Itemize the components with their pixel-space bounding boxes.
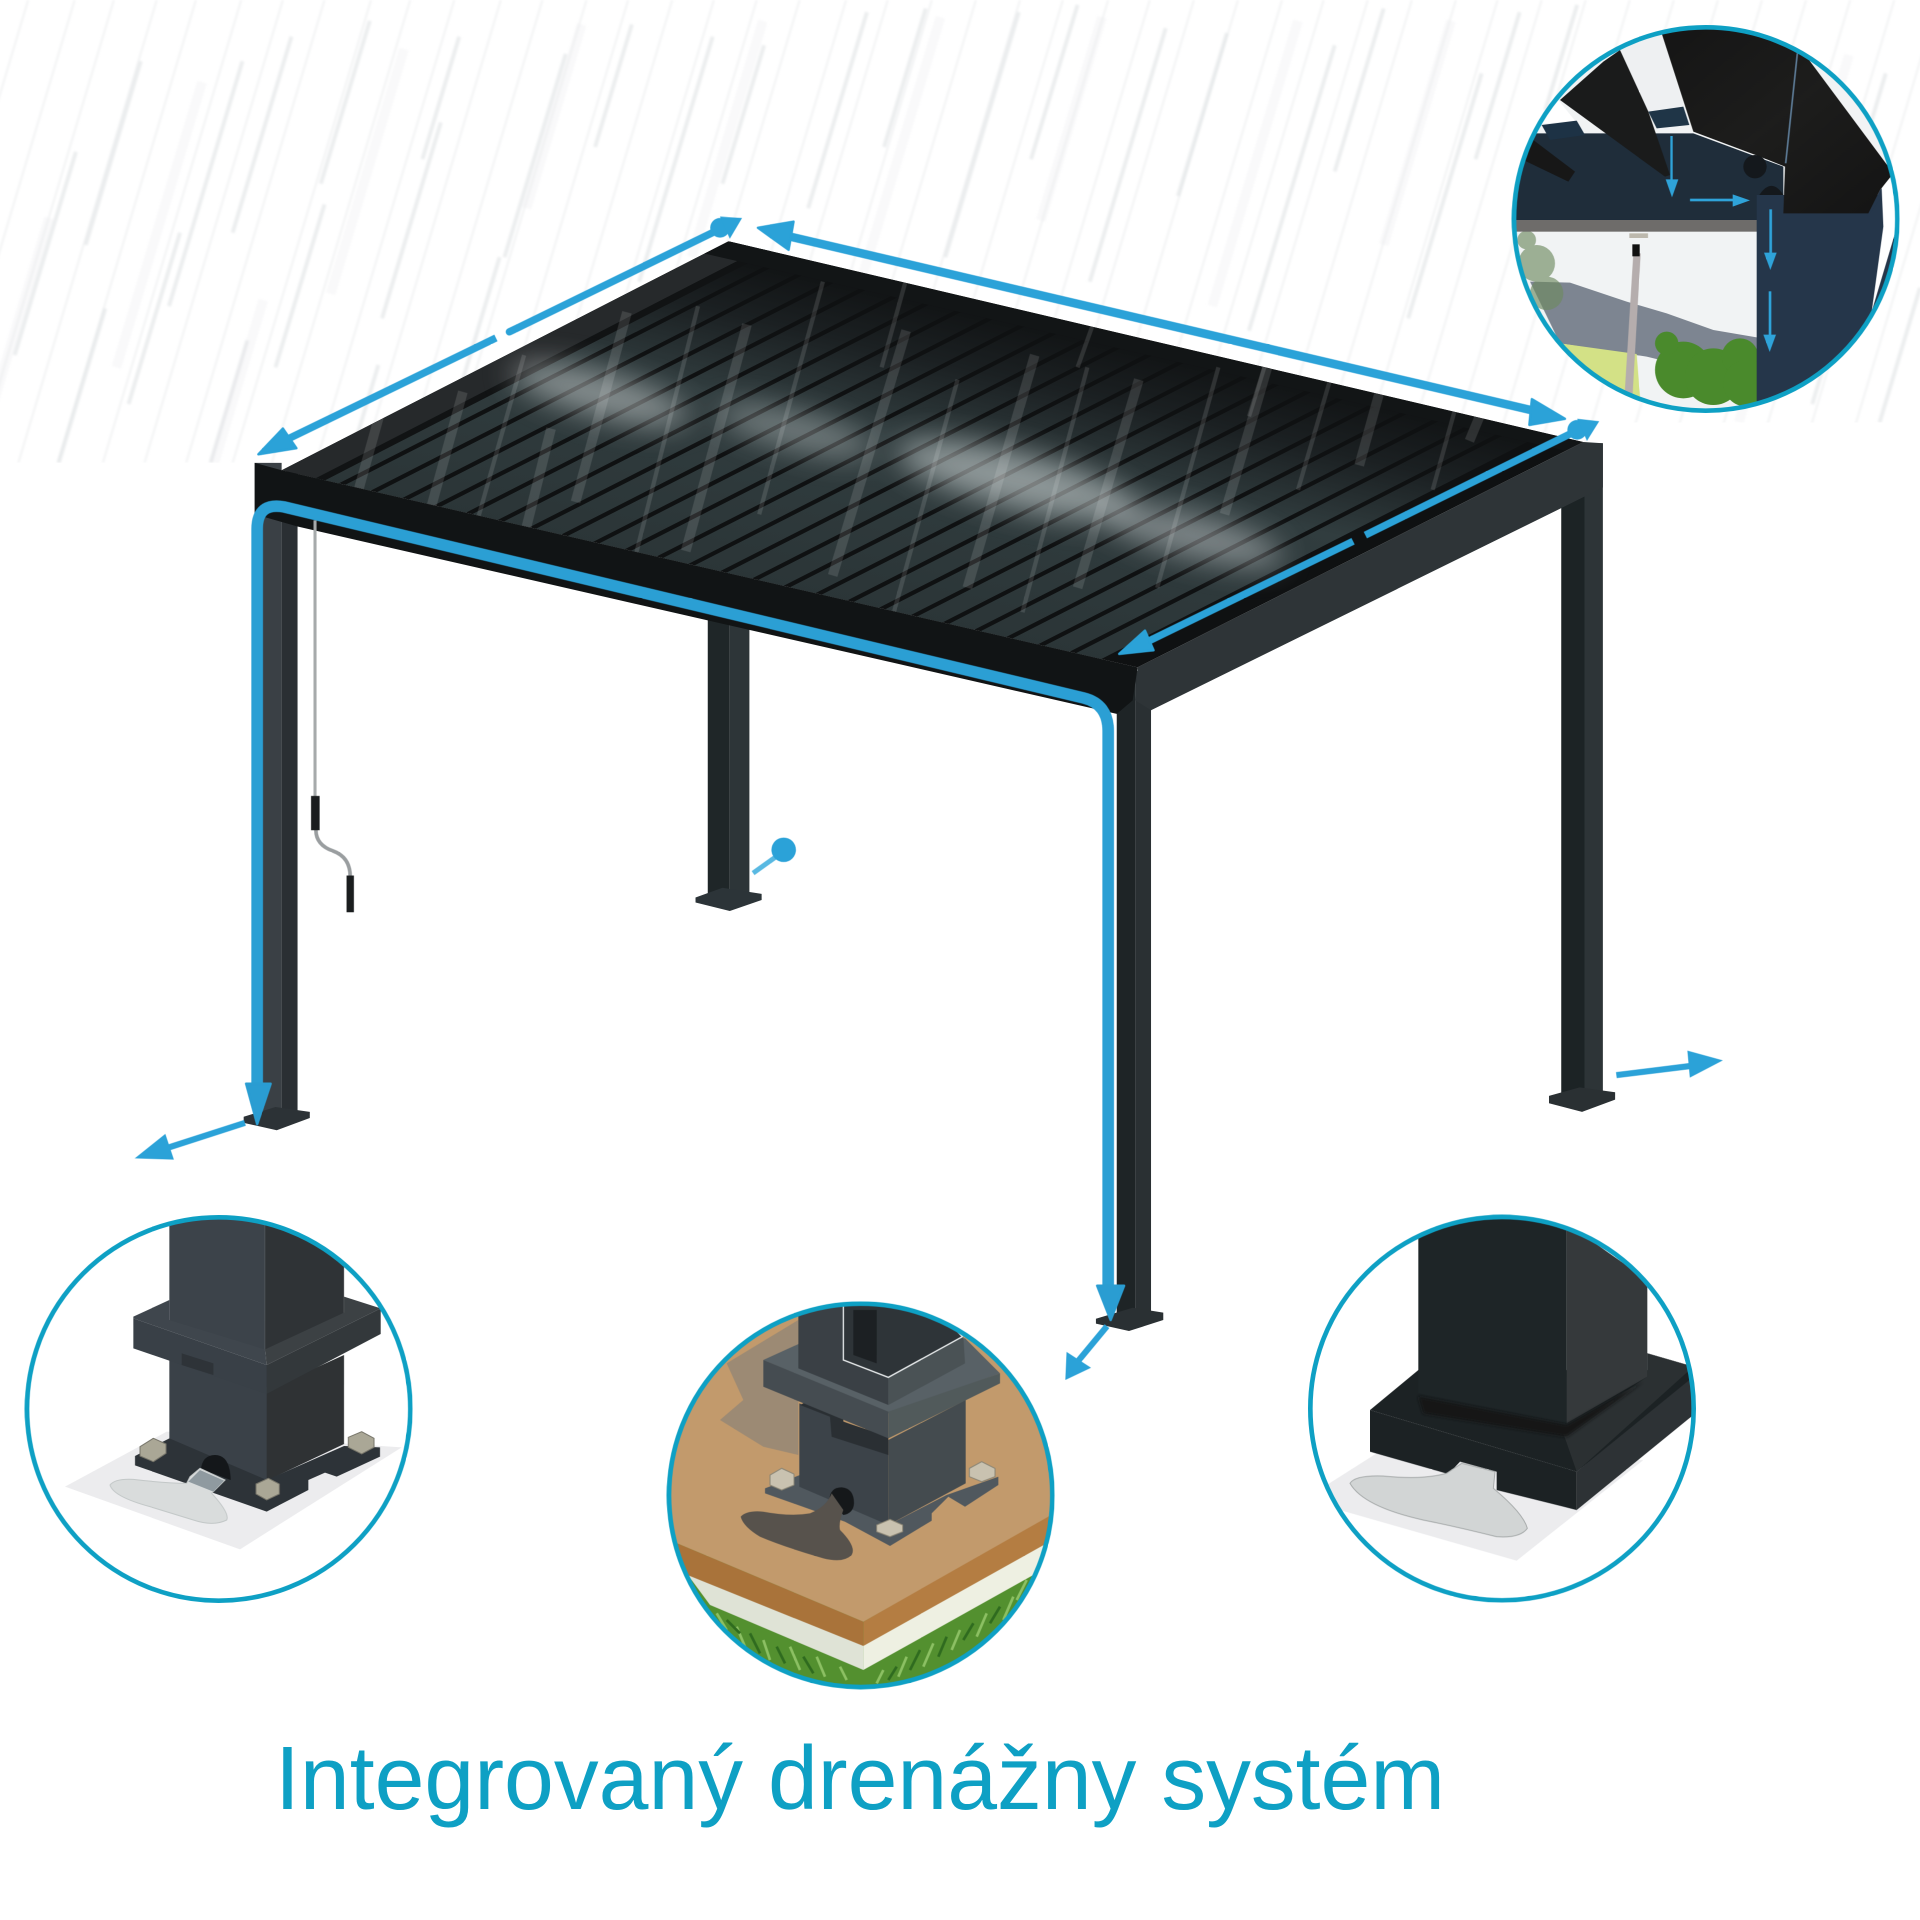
post opening xyxy=(798,1300,888,1405)
bolts xyxy=(770,1462,995,1537)
pergola illustration xyxy=(135,217,1723,1380)
slats xyxy=(1560,50,1670,177)
grass xyxy=(663,1530,1060,1690)
hill xyxy=(1530,282,1757,360)
base plate xyxy=(135,1438,380,1512)
beam: right side xyxy=(1135,442,1603,710)
wood deck side xyxy=(673,1512,1053,1646)
post: back xyxy=(696,612,762,911)
post: centre front xyxy=(1096,671,1163,1331)
bolts xyxy=(140,1432,374,1500)
drain hole xyxy=(829,1487,854,1515)
roof with slats xyxy=(282,241,1583,668)
skylights xyxy=(1620,33,1683,112)
arrow: right roof edge xyxy=(1119,419,1599,654)
lawn xyxy=(1560,343,1640,397)
right post xyxy=(1756,195,1884,402)
collar xyxy=(763,1338,1000,1413)
base plate xyxy=(765,1475,998,1546)
floor plate xyxy=(1327,1453,1643,1561)
arrow: back roof edge xyxy=(758,222,1565,425)
wet puddle xyxy=(741,1493,853,1560)
roof corner xyxy=(1662,23,1893,213)
post column xyxy=(169,1210,265,1350)
title: Integrovaný drenážny systém xyxy=(275,1729,1445,1829)
arrow: left post outflow xyxy=(135,1123,245,1160)
arrow: left roof edge xyxy=(258,217,742,454)
callout circle: right post base xyxy=(1310,1210,1694,1600)
background: rain streaks xyxy=(0,0,1920,463)
white layer xyxy=(687,1540,1047,1670)
beam xyxy=(1513,133,1783,220)
cast shadow xyxy=(720,1320,798,1455)
arrow: main gutter path along front beam and down posts xyxy=(246,506,1124,1320)
floor plate xyxy=(65,1432,402,1549)
lower body xyxy=(169,1357,267,1481)
bush xyxy=(1654,332,1757,406)
arrow: centre post outflow xyxy=(1065,1326,1107,1380)
column xyxy=(1418,1210,1567,1423)
post: right xyxy=(1549,443,1615,1112)
crank handle xyxy=(311,520,354,912)
drain hole xyxy=(201,1455,231,1480)
puddle xyxy=(1350,1463,1527,1537)
arrow: right post outflow xyxy=(1616,1051,1723,1078)
post: left front xyxy=(244,463,310,1130)
base plate top xyxy=(1370,1353,1693,1472)
base plate sides xyxy=(1370,1410,1577,1510)
callout circle: top right gutter detail xyxy=(1510,23,1903,417)
arrow: back post outflow xyxy=(753,838,796,873)
collar xyxy=(133,1300,267,1365)
callout circle: bottom left post base xyxy=(27,1210,410,1601)
tree xyxy=(1517,231,1563,310)
flow arrows xyxy=(1666,136,1777,352)
pole xyxy=(1625,253,1641,393)
callout circle: middle post base on wood deck xyxy=(663,1293,1060,1690)
wood deck top xyxy=(663,1293,1060,1622)
puddle xyxy=(110,1468,227,1523)
beam: front xyxy=(255,463,1138,714)
lower body xyxy=(799,1403,888,1525)
